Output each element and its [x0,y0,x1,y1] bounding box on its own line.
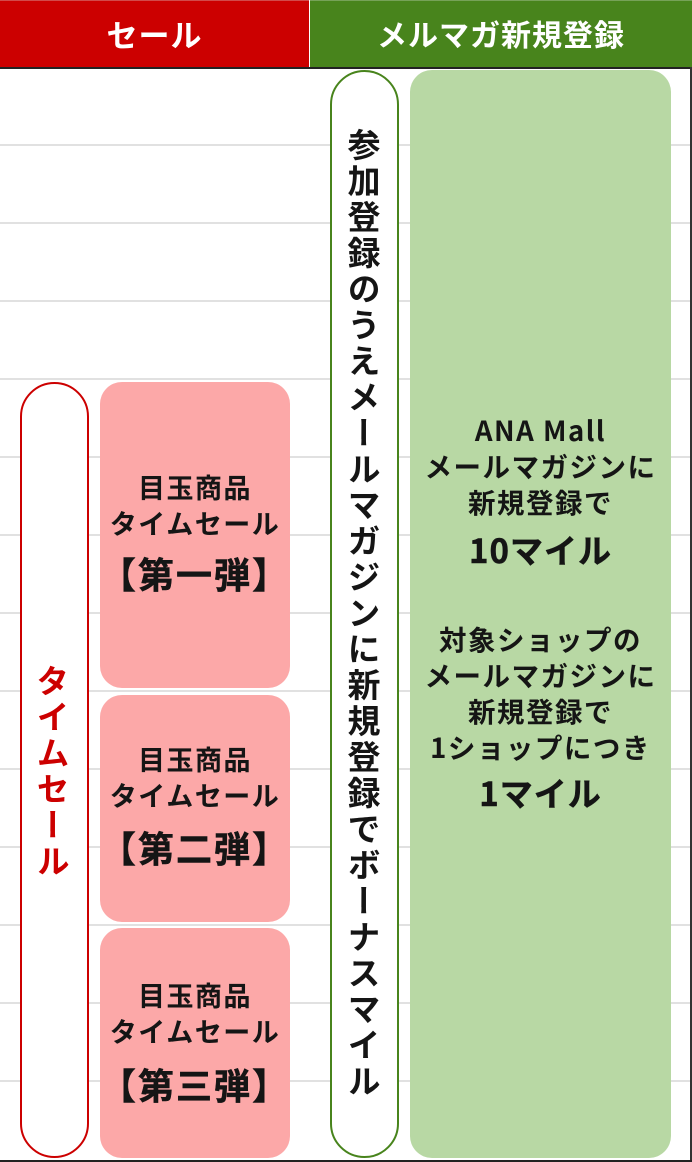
panel heading: 【第三弾】: 【第三弾】 [100,1058,290,1110]
text: ANA Mall メールマガジンに新規登録で: メールマガジンに [424,445,656,485]
panel: 第二弾 [100,695,290,922]
panel: ANA Mall マイル [410,70,671,1158]
header: セール: セール [106,11,202,56]
panel text: 目玉商品タイムセール [110,975,280,1050]
pill label: 参加登録のうえ…: 参加登録のうえメールマガジンに新規登録でボーナスマイル [340,128,388,1100]
panel text: 目玉商品タイムセール [110,467,280,542]
panel: 第一弾 [100,382,290,688]
panel text: 目玉商品タイムセール: 目玉商品 [138,975,252,1014]
panel text: 目玉商品タイムセール [110,739,280,814]
panel: 第三弾 [100,928,290,1158]
panel heading: 【第二弾】: 【第二弾】 [100,821,290,873]
panel text: 目玉商品タイムセール: 目玉商品 [138,739,252,778]
text: ANA Mall メールマガジンに新規登録で: 新規登録で [468,481,613,521]
pill label: タイムセール: タイムセール [29,664,77,880]
header: セール [0,0,309,67]
text: 対象ショップのメールマガジンに新規登録で1ショップにつき: 対象ショップの [439,618,642,658]
panel text: 目玉商品タイムセール: タイムセール [110,1011,280,1050]
text: 対象ショップのメールマガジンに新規登録で1ショップにつき [424,618,656,766]
text: ANA Mall メールマガジンに新規登録で: ANA Mall [475,409,606,449]
pill: 参加登録のうえメールマガジンに新規登録でボーナスマイル [330,70,399,1158]
panel text: 目玉商品タイムセール: タイムセール [110,775,280,814]
text: ANA Mall メールマガジンに新規登録で [424,409,656,521]
header: メルマガ新規登録 [310,0,692,67]
panel text: 目玉商品タイムセール: 目玉商品 [138,467,252,506]
panel text: 目玉商品タイムセール: タイムセール [110,503,280,542]
text: 対象ショップのメールマガジンに新規登録で1ショップにつき: 新規登録で [468,690,613,730]
panel heading: 【第一弾】: 【第一弾】 [100,547,290,599]
text: 対象ショップのメールマガジンに新規登録で1ショップにつき: 1ショップにつき [430,726,651,766]
text: 対象ショップのメールマガジンに新規登録で1ショップにつき: メールマガジンに [424,654,656,694]
figure: 10マイル: 10マイル [469,525,612,573]
figure: 1マイル: 1マイル [479,768,602,816]
pill: タイムセール [20,382,89,1158]
header: メルマガ新規登録: メルマガ新規登録 [377,11,625,55]
